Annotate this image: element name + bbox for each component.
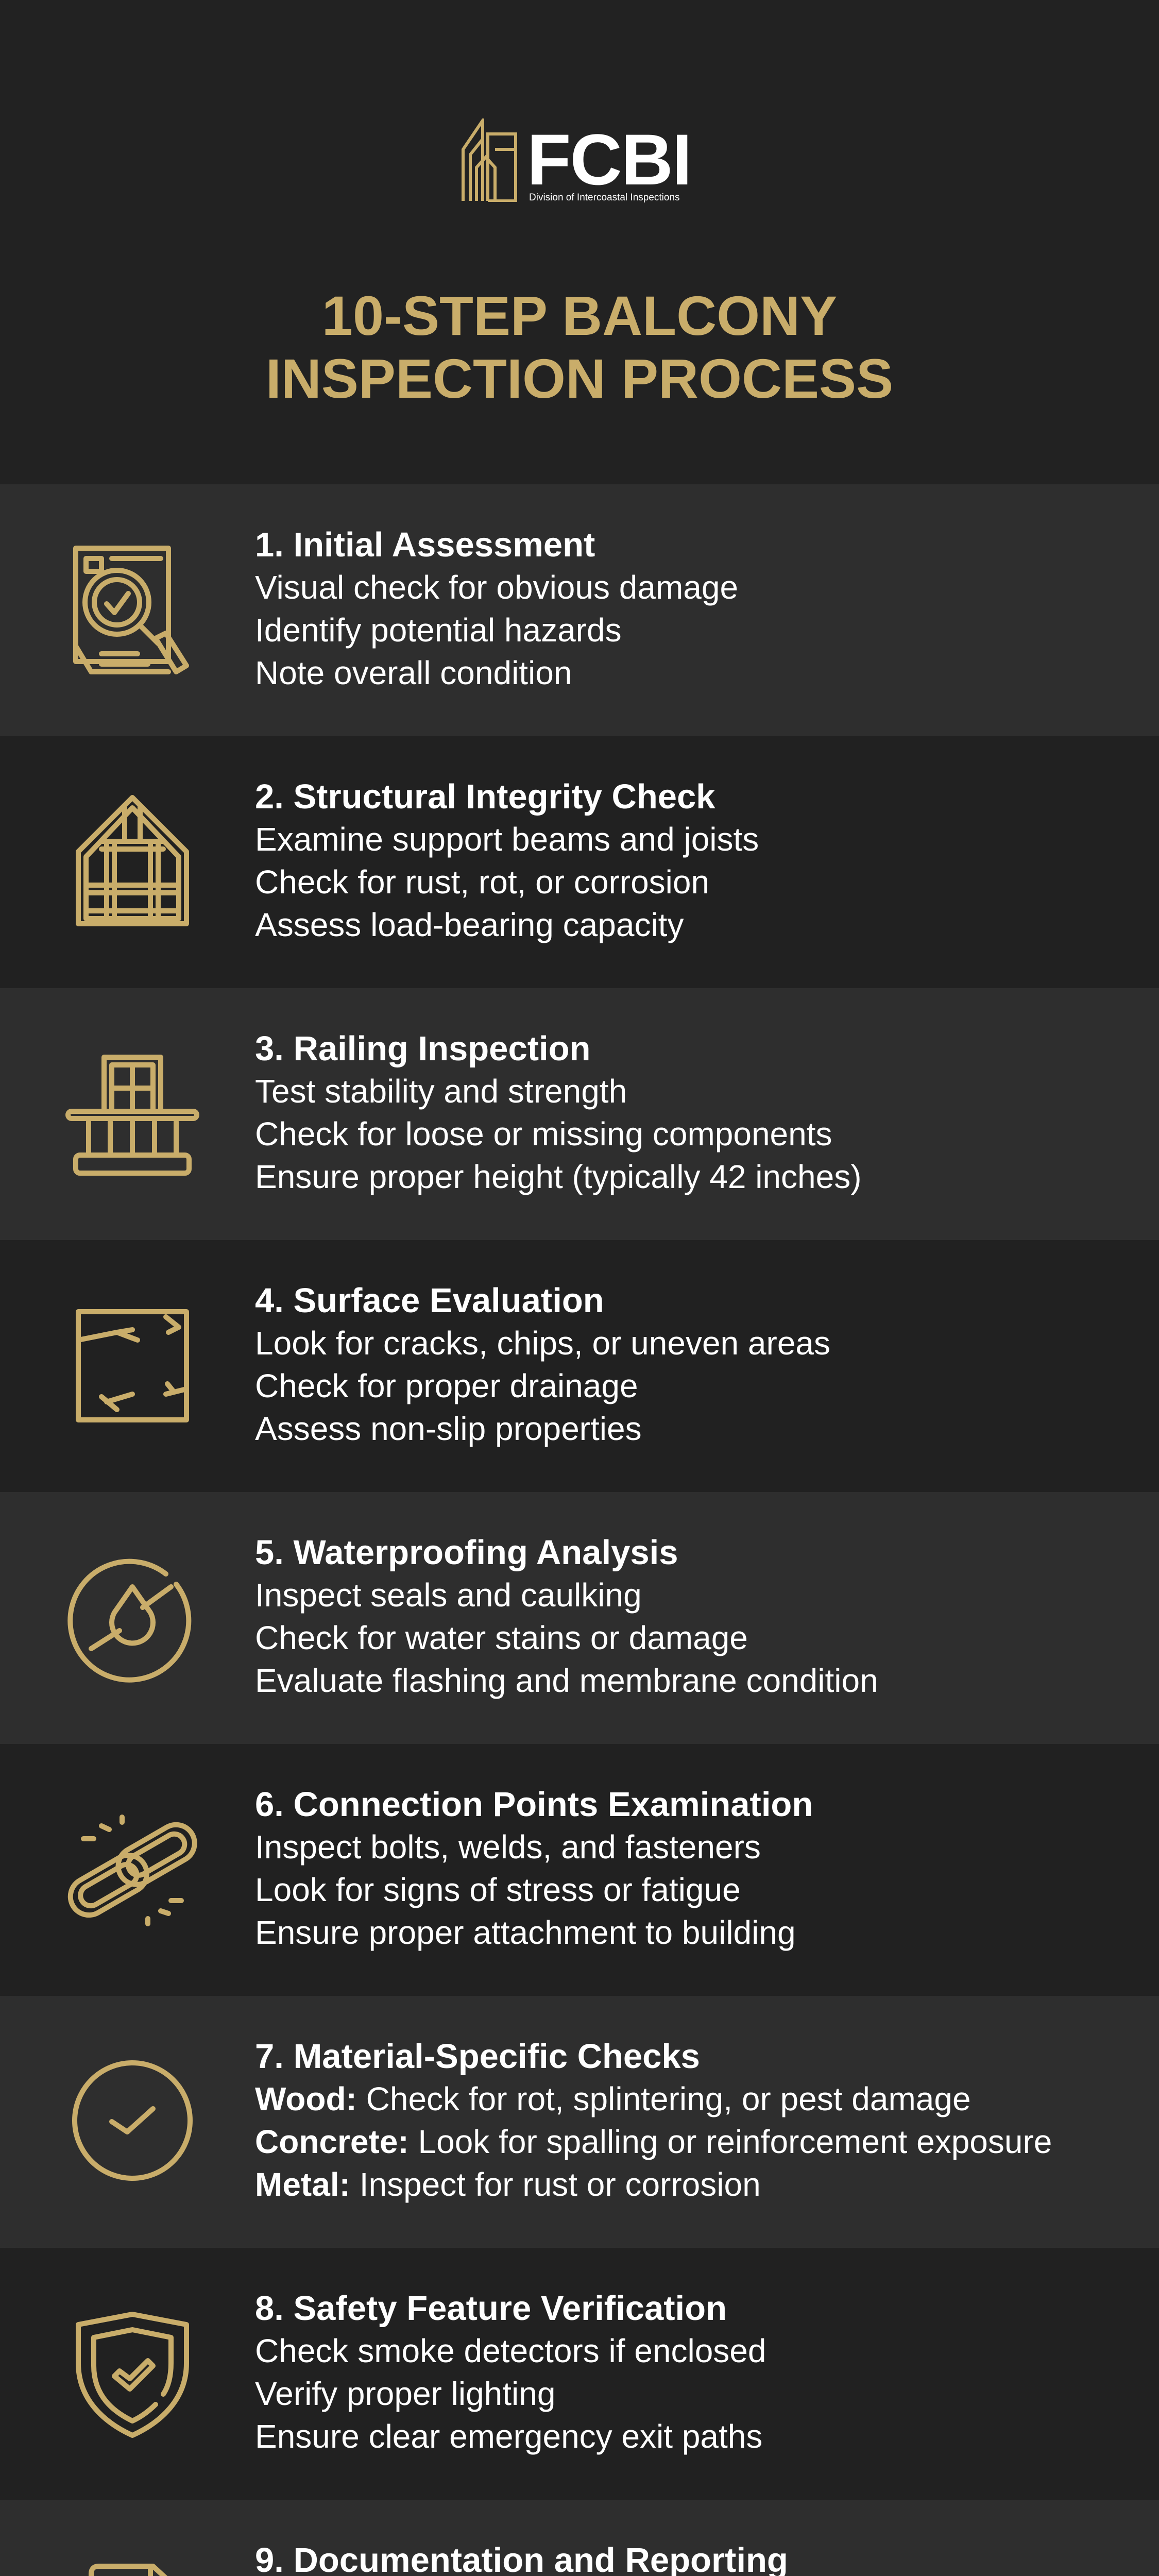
icon: check circle — [72, 2060, 193, 2181]
text: step 4: Assess non-slip properties — [255, 1410, 642, 1447]
text: step 6: 6. Connection Points Examination — [255, 1785, 813, 1824]
text: step 4: Look for cracks, chips, or uneven areas — [255, 1325, 830, 1362]
icon: shield — [76, 2312, 189, 2438]
title: 10-STEP BALCONY — [322, 284, 837, 347]
text: step 5: Evaluate flashing and membrane condition — [255, 1662, 878, 1699]
icon: cracked surface — [76, 1309, 189, 1422]
text: step 2 — [255, 777, 759, 943]
text: step 3: Test stability and strength — [255, 1073, 627, 1110]
text: step 4: 4. Surface Evaluation — [255, 1281, 604, 1320]
title: INSPECTION PROCESS — [266, 347, 893, 410]
text: step 7: Metal: Inspect for rust or corrosion — [255, 2166, 761, 2203]
text: step 4 — [255, 1281, 830, 1447]
panel: step 6 — [0, 1744, 1159, 1996]
text: step 8: Check smoke detectors if enclosed — [255, 2332, 766, 2369]
text: step 2: Examine support beams and joists — [255, 821, 759, 858]
panel: step 3 — [0, 988, 1159, 1240]
text: step 2: Check for rust, rot, or corrosion — [255, 863, 709, 901]
panel: step 5 — [0, 1492, 1159, 1744]
text: step 1: Visual check for obvious damage — [255, 569, 738, 606]
text: step 2: 2. Structural Integrity Check — [255, 777, 715, 816]
text: step 5 — [255, 1533, 878, 1699]
text: step 3: Check for loose or missing components — [255, 1115, 832, 1153]
title — [266, 284, 893, 410]
panel: step 8 — [0, 2248, 1159, 2500]
text: step 6 — [255, 1785, 813, 1951]
icon: document — [89, 2564, 167, 2576]
icon: chain link — [68, 1815, 197, 1926]
panel: step 2 — [0, 736, 1159, 988]
text: step 5: Inspect seals and caulking — [255, 1577, 642, 1614]
text: step 1: Note overall condition — [255, 654, 572, 691]
text: step 6: Ensure proper attachment to building — [255, 1914, 796, 1951]
icon: building — [462, 118, 517, 202]
text: step 8 — [255, 2289, 766, 2455]
text: step 1: Identify potential hazards — [255, 612, 622, 649]
text: step 7: Wood: Check for rot, splintering, or pest damage — [255, 2080, 971, 2117]
text: step 6: Inspect bolts, welds, and fasteners — [255, 1828, 761, 1866]
brand name: FCBI — [527, 119, 691, 200]
panel: step 1 — [0, 484, 1159, 736]
text: step 5: 5. Waterproofing Analysis — [255, 1533, 678, 1572]
text: step 1: 1. Initial Assessment — [255, 526, 595, 564]
icon: water drop — [67, 1559, 192, 1683]
logo — [462, 118, 691, 203]
panel: step 7 — [0, 1996, 1159, 2248]
icon: house frame — [76, 795, 189, 926]
text: step 3: 3. Railing Inspection — [255, 1029, 590, 1068]
tagline: Division of Intercoastal Inspections — [529, 192, 680, 203]
text: step 8: 8. Safety Feature Verification — [255, 2289, 727, 2328]
text: step 4: Check for proper drainage — [255, 1367, 638, 1404]
text: step 1 — [255, 526, 738, 691]
text: step 3: Ensure proper height (typically 42 inches) — [255, 1158, 861, 1195]
text: step 2: Assess load-bearing capacity — [255, 906, 684, 943]
text: step 5: Check for water stains or damage — [255, 1619, 748, 1656]
text: step 3 — [255, 1029, 861, 1195]
icon: balcony railing — [65, 1055, 199, 1176]
text: step 7: Concrete: Look for spalling or reinforcement exposure — [255, 2123, 1052, 2160]
text: step 8: Verify proper lighting — [255, 2375, 555, 2412]
panel: step 4 — [0, 1240, 1159, 1492]
text: step 7: 7. Material-Specific Checks — [255, 2037, 700, 2076]
text: step 6: Look for signs of stress or fatigue — [255, 1871, 741, 1908]
panel: step 9 — [0, 2500, 1159, 2576]
text: step 7 — [255, 2037, 1052, 2203]
text: step 8: Ensure clear emergency exit paths — [255, 2418, 762, 2455]
icon: document magnifier — [73, 546, 189, 674]
